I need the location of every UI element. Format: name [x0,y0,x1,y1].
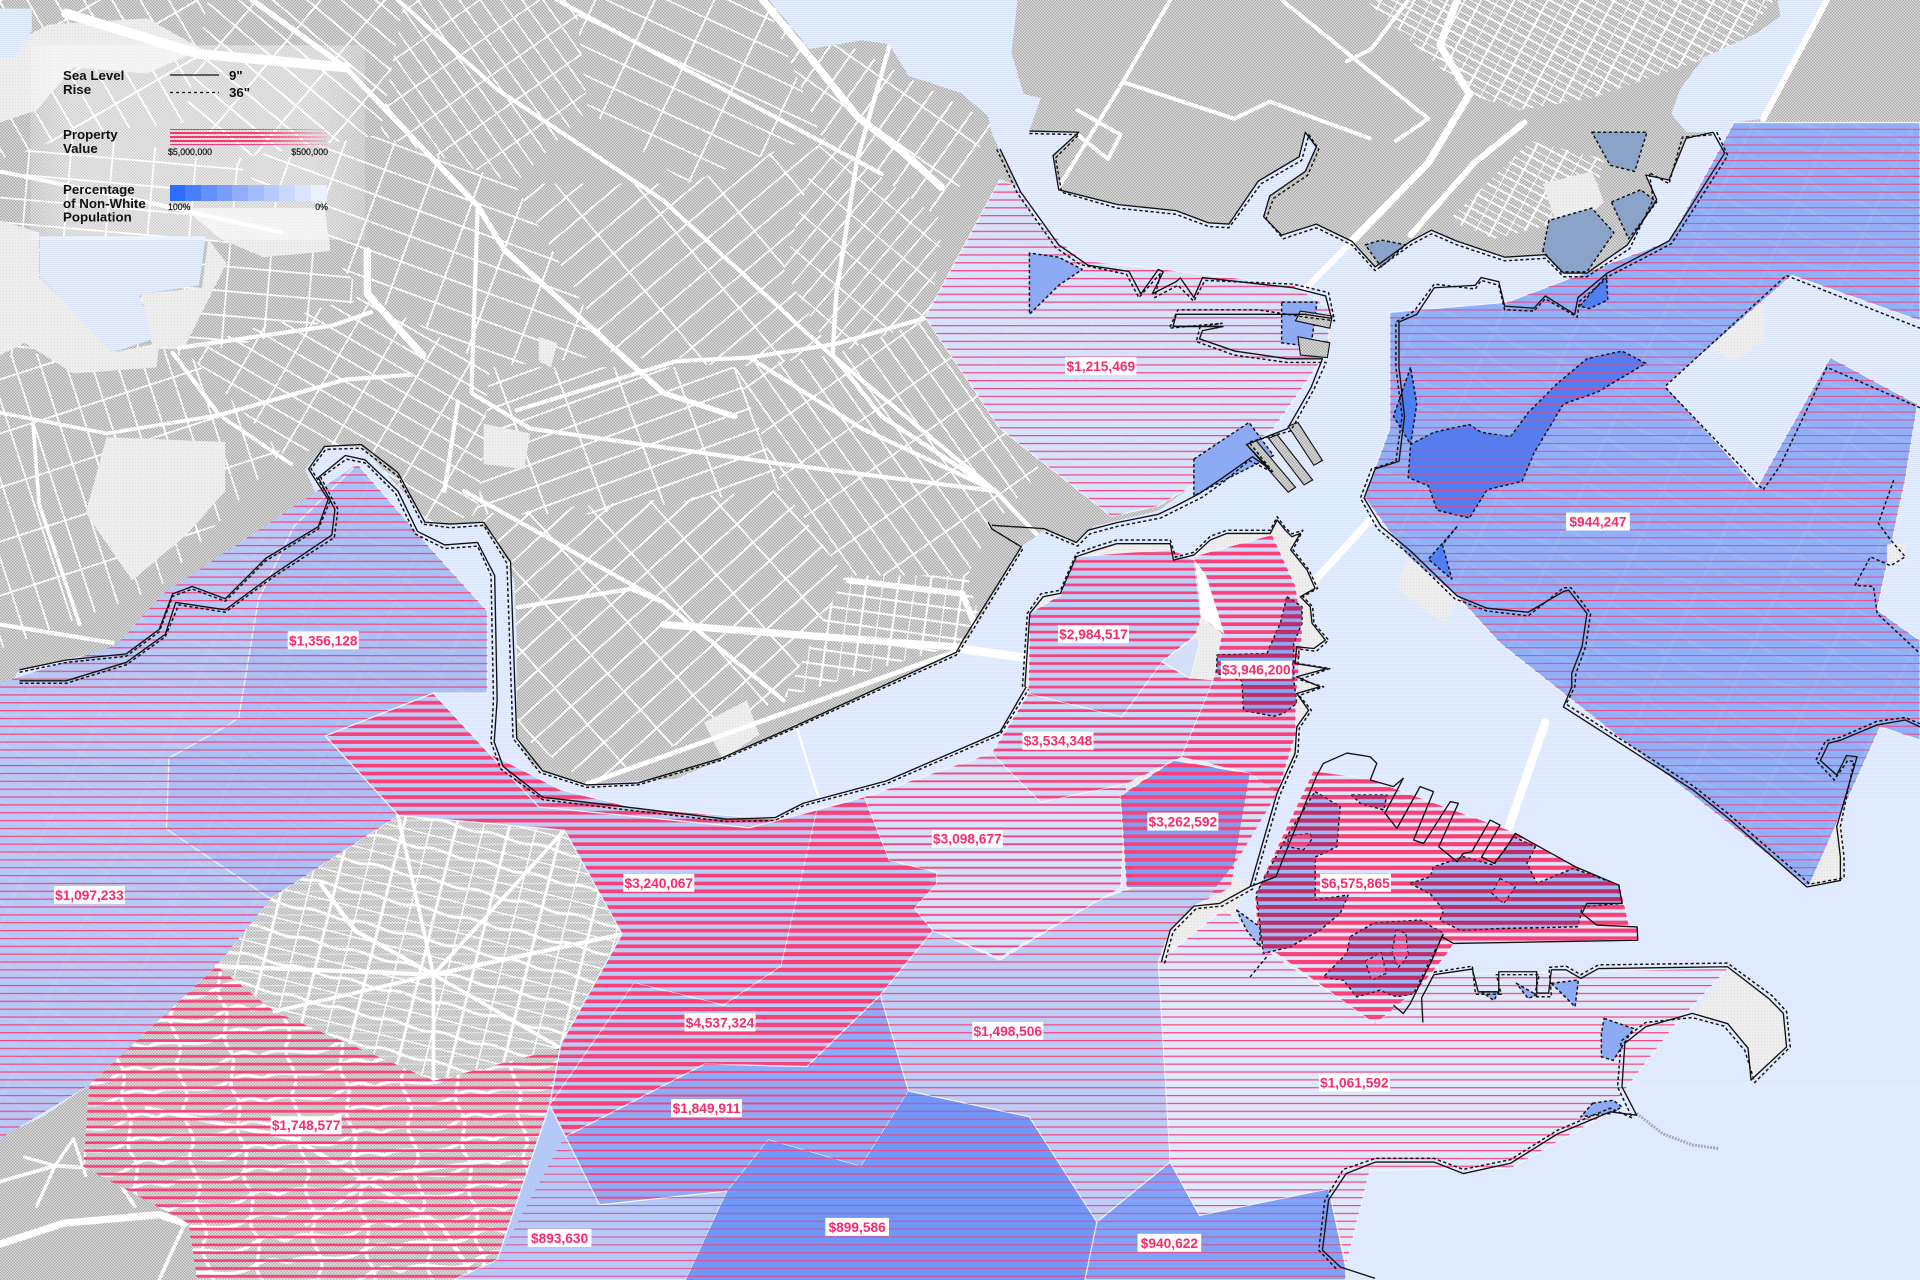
stripes over East Boston flood [1408,351,1646,518]
legend: sea level rise [63,68,250,100]
label: $3,098,677: $3,098,677 [933,832,1002,847]
stripes: tract $1,849,911 [564,995,909,1205]
shoreline: Charles River 9 inch and 36 inch lines [20,444,1029,822]
legend: sea level rise: 36" [229,85,250,100]
panel: tract $3,262,592 [1120,760,1250,888]
legend: property value: $5,000,000 [168,147,212,157]
label: $899,586: $899,586 [829,1220,886,1235]
legend: property value: Property [63,127,118,142]
panel: tract $1,849,911 [564,995,909,1205]
legend: sea level rise: Sea Level [63,68,124,83]
panel: tract $3,240,067 and $4,537,324 [325,693,937,1137]
legend: percentage of non-white population: of Non-White [63,196,146,211]
panel: tract $893,630 [453,1105,727,1280]
label: $2,984,517: $2,984,517 [1059,627,1128,642]
shore land beneath downtown tracts [1025,520,1327,961]
panel: tract $940,622 [1085,1162,1346,1280]
label: $6,575,865: $6,575,865 [1321,876,1390,891]
flood areas: East Boston [1393,276,1646,579]
panel: tract $1,061,592 [1158,909,1728,1264]
panel: strip between downtown and seaport [1194,774,1277,906]
legend: percentage of non-white population [63,182,328,224]
legend: percentage of non-white population: Population [63,210,132,224]
label: $944,247: $944,247 [1569,515,1627,530]
legend: property value [63,127,328,157]
land: Castle Island [1692,969,1787,1080]
label: $1,498,506: $1,498,506 [973,1024,1042,1039]
panel: tract $3,946,200 [1182,535,1302,793]
harbor bridges [796,241,1545,828]
land: spit near Castle Island [1637,1114,1719,1149]
shoreline: Charlestown and Chelsea [1029,131,1713,277]
panel: tract $3,534,348 [992,662,1213,802]
upper inlet and ponds [0,0,1827,353]
panel: tract $3,098,677 [864,753,1127,958]
legend: sea level rise: Rise [63,82,91,97]
label: $1,849,911: $1,849,911 [673,1101,741,1116]
label: $1,061,592: $1,061,592 [1320,1075,1389,1090]
land: lower left corner [0,1085,197,1280]
shoreline: downtown waterfront [1022,517,1330,964]
label: $1,356,128: $1,356,128 [289,633,358,648]
piers: north tract [1247,311,1332,492]
upper right land roads [1059,0,1827,241]
legend: property value: Value [63,141,98,156]
flood areas: downtown [1217,597,1302,716]
legend backdrop [31,45,365,240]
flood areas: north tract [1029,253,1317,496]
shoreline: north tract waterfront [992,149,1335,546]
panel: tract $6,575,865 [1255,771,1638,1024]
label: $3,240,067: $3,240,067 [624,876,693,891]
shoreline: East Boston [1360,132,1920,887]
label: $3,262,592: $3,262,592 [1149,815,1218,830]
label: $3,946,200: $3,946,200 [1222,663,1291,678]
panel: tract $1,215,469 [925,180,1332,516]
land fragments on East Boston edges [1396,300,1905,887]
flood areas: South Boston shoreline [1482,980,1633,1117]
panel: tract $2,984,517 [1029,550,1202,717]
legend: percentage of non-white population: 0% [315,202,328,212]
panel: tract $1,748,577 [83,816,622,1280]
label: $3,534,348: $3,534,348 [1024,734,1093,749]
label: $1,748,577: $1,748,577 [272,1118,341,1133]
panel: tract $1,498,506 [880,888,1231,1222]
panel: tract $899,586 [686,1091,1097,1280]
major roads [0,0,1041,784]
harbour land flooded pockets, Charlestown side [1365,132,1657,272]
legend: sea level rise: 9" [229,68,243,83]
legend: percentage of non-white population: 100% [168,202,191,212]
panel: tract west, $1,097,233 and $1,356,128 [0,464,487,1139]
shoreline: Seaport and South Boston [1250,753,1790,1278]
parks and open space [0,18,1604,759]
legend: property value: $500,000 [291,147,328,157]
label: $1,215,469: $1,215,469 [1067,359,1135,374]
label: $940,622: $940,622 [1141,1236,1198,1251]
flood areas: Seaport [1237,792,1622,997]
panel: tract $944,247 [1364,122,1920,887]
value labels [54,357,1630,1252]
label: $1,097,233: $1,097,233 [55,888,124,903]
legend: percentage of non-white population: Percentage [63,182,135,197]
label: $4,537,324: $4,537,324 [686,1015,755,1030]
label: $893,630: $893,630 [531,1231,589,1246]
street network: Boston neighbourhood grids [0,0,1774,784]
panel: small tract triangle [1162,637,1200,678]
